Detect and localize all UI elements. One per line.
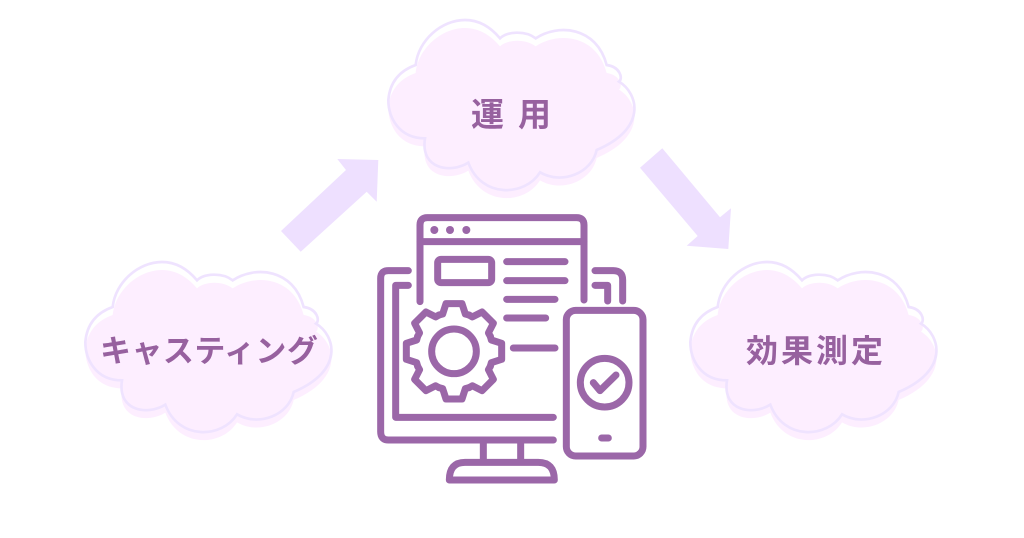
monitor (381, 271, 623, 480)
icon: monitor, browser window, gear and smartphone (381, 218, 643, 480)
arrow: casting to operation (281, 159, 378, 252)
cloud: 運用 (388, 20, 634, 198)
gear (406, 304, 502, 399)
smartphone (566, 310, 643, 456)
cloud: 効果測定 (690, 262, 936, 440)
label: 運用: 運用 (471, 96, 565, 133)
label: 効果測定: 効果測定 (746, 333, 886, 369)
arrow: operation to measurement (640, 148, 731, 249)
browser window (420, 218, 584, 348)
label: キャスティング: キャスティング (100, 334, 318, 369)
cloud: キャスティング (85, 262, 331, 440)
